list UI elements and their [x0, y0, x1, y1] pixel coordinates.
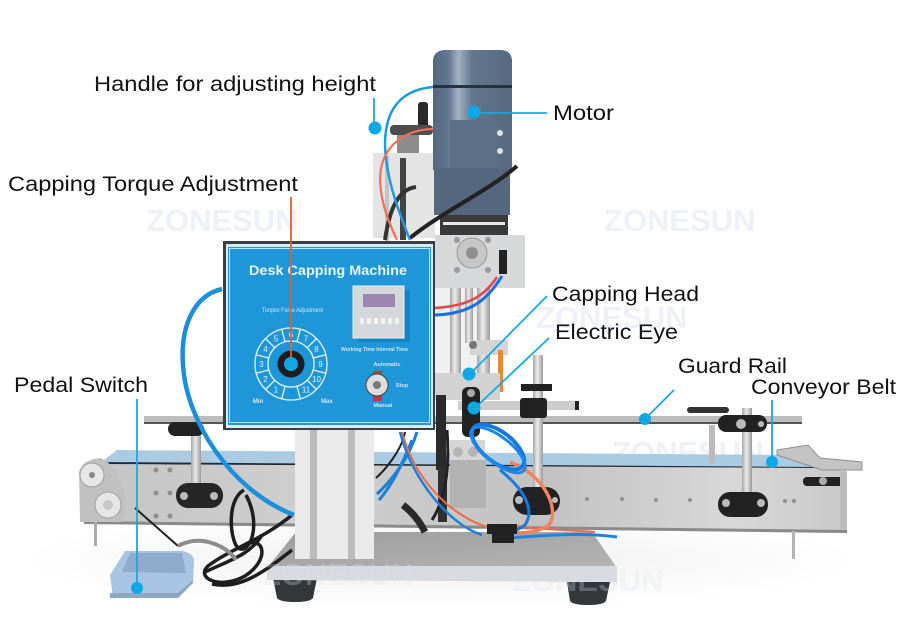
callout: pedal switch: Pedal Switch [14, 374, 148, 397]
callout: motor: Motor [553, 102, 614, 125]
callout: guard rail: Guard Rail [678, 355, 787, 378]
callout: motor [468, 102, 614, 125]
capping head assembly [436, 387, 486, 522]
watermarks over base: ZONESUN [262, 557, 414, 592]
legs [94, 522, 97, 546]
torque dial: 8 [314, 345, 319, 354]
torque dial: 7 [304, 334, 309, 344]
conveyor belt surface [100, 450, 817, 468]
torque dial: 9 [318, 360, 323, 369]
callout: conveyor belt [751, 376, 896, 468]
mounting block [435, 235, 525, 288]
watermarks: ZONESUN [536, 300, 688, 335]
blue air tube from panel [183, 289, 294, 515]
height handle [418, 102, 428, 128]
callout: guard rail [639, 355, 787, 425]
conveyor body [84, 464, 847, 533]
torque dial: 10 [312, 375, 321, 384]
panel column [295, 428, 374, 559]
panel title: Desk Capping Machine [249, 262, 407, 278]
watermarks: ZONESUN [146, 203, 298, 238]
min max: Min [253, 399, 263, 405]
black cables at motor [410, 166, 517, 238]
control panel: Max [321, 399, 333, 405]
torque dial: 1 [274, 386, 279, 394]
callout: handle for adjusting height: Handle for adjusting height [94, 73, 376, 96]
timer caption: Working Time Interval Time [341, 347, 408, 353]
pedal switch and cords [110, 490, 292, 598]
timer display [353, 286, 410, 342]
callout: handle for adjusting height [94, 73, 382, 134]
pedal body [110, 551, 194, 597]
side clamp [803, 477, 845, 486]
air and power tubes upper [380, 87, 502, 315]
callout: electric eye [468, 321, 678, 414]
motor [433, 50, 512, 235]
torque dial: 5 [274, 334, 279, 344]
watermarks: ZONESUN [604, 203, 756, 238]
conveyor [79, 445, 862, 559]
watermarks [146, 203, 764, 470]
callout: electric eye: Electric Eye [555, 321, 678, 344]
watermarks: ZONESUN [612, 435, 764, 470]
mode switch: Stop [396, 383, 409, 389]
mode switch: Automatic [374, 362, 400, 368]
fittings [487, 524, 517, 543]
watermarks over base [262, 557, 664, 598]
column behind motor [373, 102, 525, 400]
pedal cable [135, 508, 178, 546]
watermarks over base: ZONESUN [512, 563, 664, 598]
mode switch [366, 362, 409, 409]
torque dial: 11 [302, 386, 311, 394]
discharge plate [777, 445, 862, 470]
callout: capping torque adjustment [8, 173, 298, 371]
torque dial: 2 [263, 375, 268, 384]
base feet [273, 578, 317, 602]
torque dial [255, 328, 327, 400]
control panel [223, 241, 435, 430]
machine base plate [267, 532, 617, 605]
callout: capping torque adjustment: Capping Torque Adjustment [8, 173, 298, 196]
pulley end [79, 458, 126, 522]
torque dial: 4 [263, 345, 268, 354]
rods area [435, 288, 490, 378]
frame holes [154, 468, 796, 518]
torque dial: 6 [289, 330, 294, 340]
floor shadow [20, 512, 860, 608]
callout: capping head: Capping Head [552, 283, 699, 306]
callout: capping head [462, 283, 699, 380]
guard rail [144, 401, 802, 463]
mode switch: Manual [374, 403, 393, 409]
rail posts and clamps [168, 355, 768, 517]
torque dial: 3 [259, 360, 264, 369]
callout: conveyor belt: Conveyor Belt [751, 376, 896, 399]
torque caption: Torqion Force Adjustment [262, 308, 323, 314]
callout: pedal switch [14, 374, 148, 594]
tube bundle [376, 416, 617, 538]
